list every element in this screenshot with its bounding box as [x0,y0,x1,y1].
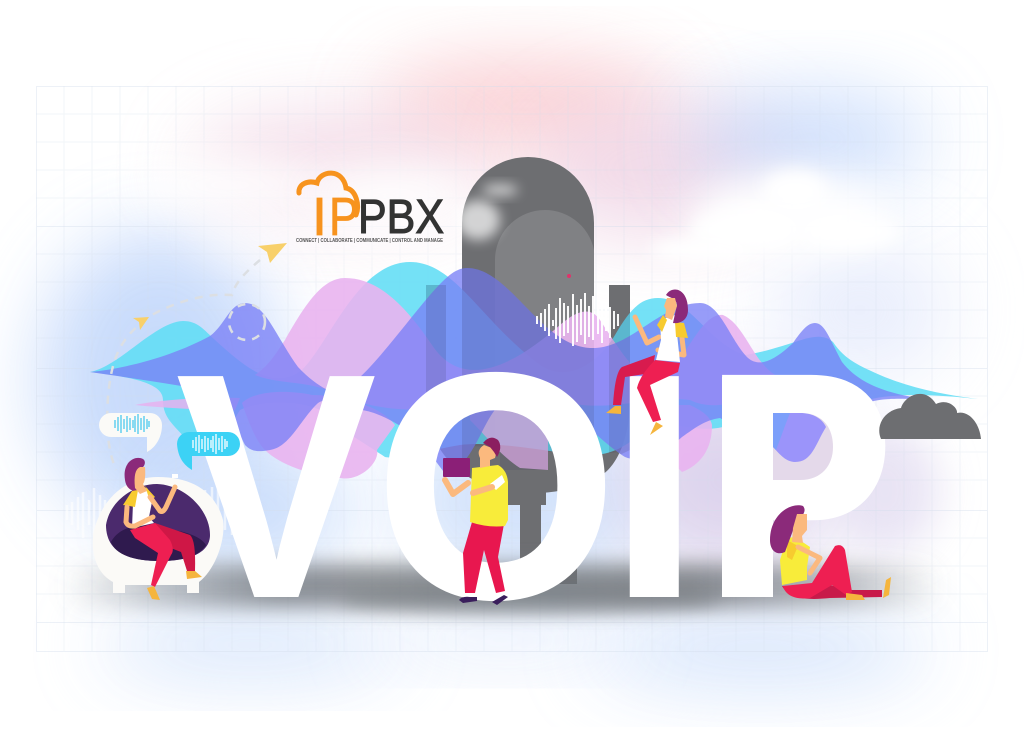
lower leg [782,585,882,599]
wave: cyan [90,262,978,458]
upper leg [783,545,852,598]
microphone [426,157,630,584]
person: woman sitting on floor [770,505,891,600]
chair [93,477,223,593]
wave: pink lower right [650,405,712,472]
back leg [613,355,655,405]
hair [125,458,145,491]
logo letter P: P [329,186,359,247]
logo letter I: I [312,187,327,247]
letter P bowl backing [749,407,881,517]
chair seat [106,484,210,561]
wave: pink in O [470,400,548,470]
person: man with tablet [443,438,508,605]
sleeve [657,315,688,338]
wave: pink upper [255,278,775,410]
shirt [132,488,154,528]
sound waves [90,262,978,479]
wave: pink lower left [242,392,395,479]
shirt [780,537,810,585]
letter O: O [375,308,617,666]
paper plane path [107,260,265,470]
cloud over microphone [456,184,518,240]
waveform: microphone [537,293,618,346]
floor shadow [60,564,945,615]
hair [666,290,688,323]
person: woman sitting on I [606,290,688,435]
shoes [459,595,508,605]
speech bubble cyan [177,432,240,470]
arm [798,547,820,573]
hair [483,438,500,457]
wave: left ribbon [135,398,240,410]
shoes [147,571,202,600]
letter P: P [705,308,893,663]
person: woman in chair [93,458,223,600]
clouds [135,157,900,263]
shoes [606,406,663,435]
shirt [470,465,508,526]
shirt [656,315,680,362]
background colour haze [40,60,950,685]
front leg [637,360,680,422]
logo PBX letters: PBX [358,191,444,244]
sleeve [787,540,798,560]
face [479,445,497,468]
letter P counter [773,413,833,480]
letter P stem thickening [722,377,773,597]
logo [296,173,444,247]
tablet [443,458,470,477]
wave: violet [90,268,933,475]
arms [126,487,175,526]
logo tagline: CONNECT | COLLABORATE | COMMUNICATE | CONTROL AND MANAGE [296,238,444,244]
sleeves [123,486,155,507]
arms [445,480,492,494]
background grid [36,86,988,652]
hair [770,505,805,553]
face [135,467,147,494]
shoes [846,577,891,600]
front leg [130,523,173,587]
letter V: V [176,307,378,666]
legs [463,522,505,593]
icon: large paper plane [258,243,287,263]
icon: small paper plane [133,317,149,330]
wave tint over microphone [426,262,630,470]
face [664,298,677,320]
speech bubble white [99,413,162,452]
back leg [150,523,195,571]
word VOIP [176,307,893,666]
face [792,514,807,543]
arms [635,317,684,355]
letter I: I [607,308,702,666]
phone [172,474,178,478]
dark cloud [879,394,981,439]
sleeve [490,475,505,490]
faint white waveforms [67,480,250,540]
logo cloud mark [299,173,358,215]
